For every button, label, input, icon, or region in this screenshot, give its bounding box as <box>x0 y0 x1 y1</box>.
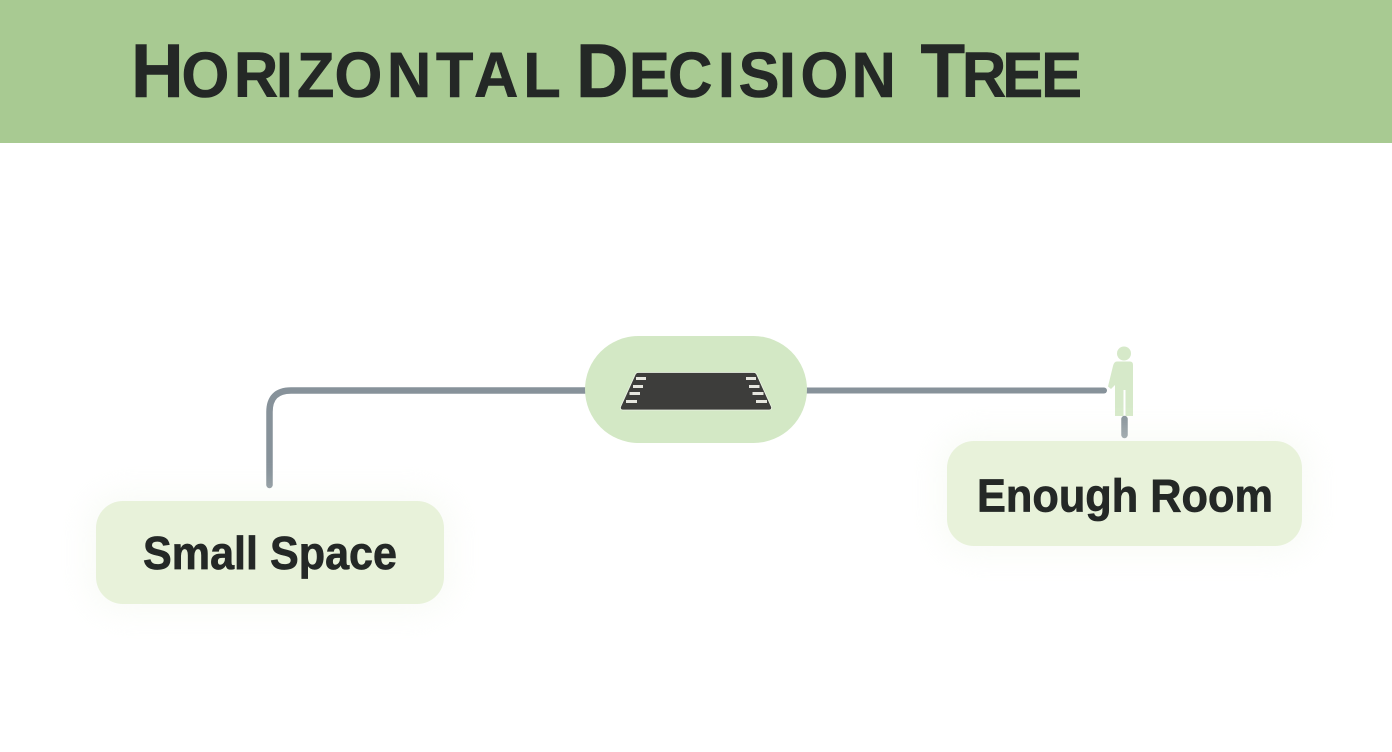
title: ECISION <box>629 40 896 111</box>
node: Enough Room <box>937 431 1312 556</box>
label: Small Space: Small Space <box>143 527 397 579</box>
title: T <box>920 29 965 113</box>
title: D <box>576 29 629 113</box>
title: H <box>131 29 184 113</box>
label: Enough Room: Enough Room <box>977 470 1273 522</box>
node: Small Space <box>86 491 454 614</box>
title: REE <box>962 40 1082 111</box>
connector: center to Enough Room <box>807 390 1124 435</box>
title: ORIZONTAL <box>182 40 561 111</box>
connector: center to Small Space <box>270 390 585 485</box>
icon: mat <box>620 372 772 410</box>
central node with mat icon <box>585 336 807 443</box>
header banner <box>0 0 1392 143</box>
icon: standing person <box>1108 346 1133 416</box>
